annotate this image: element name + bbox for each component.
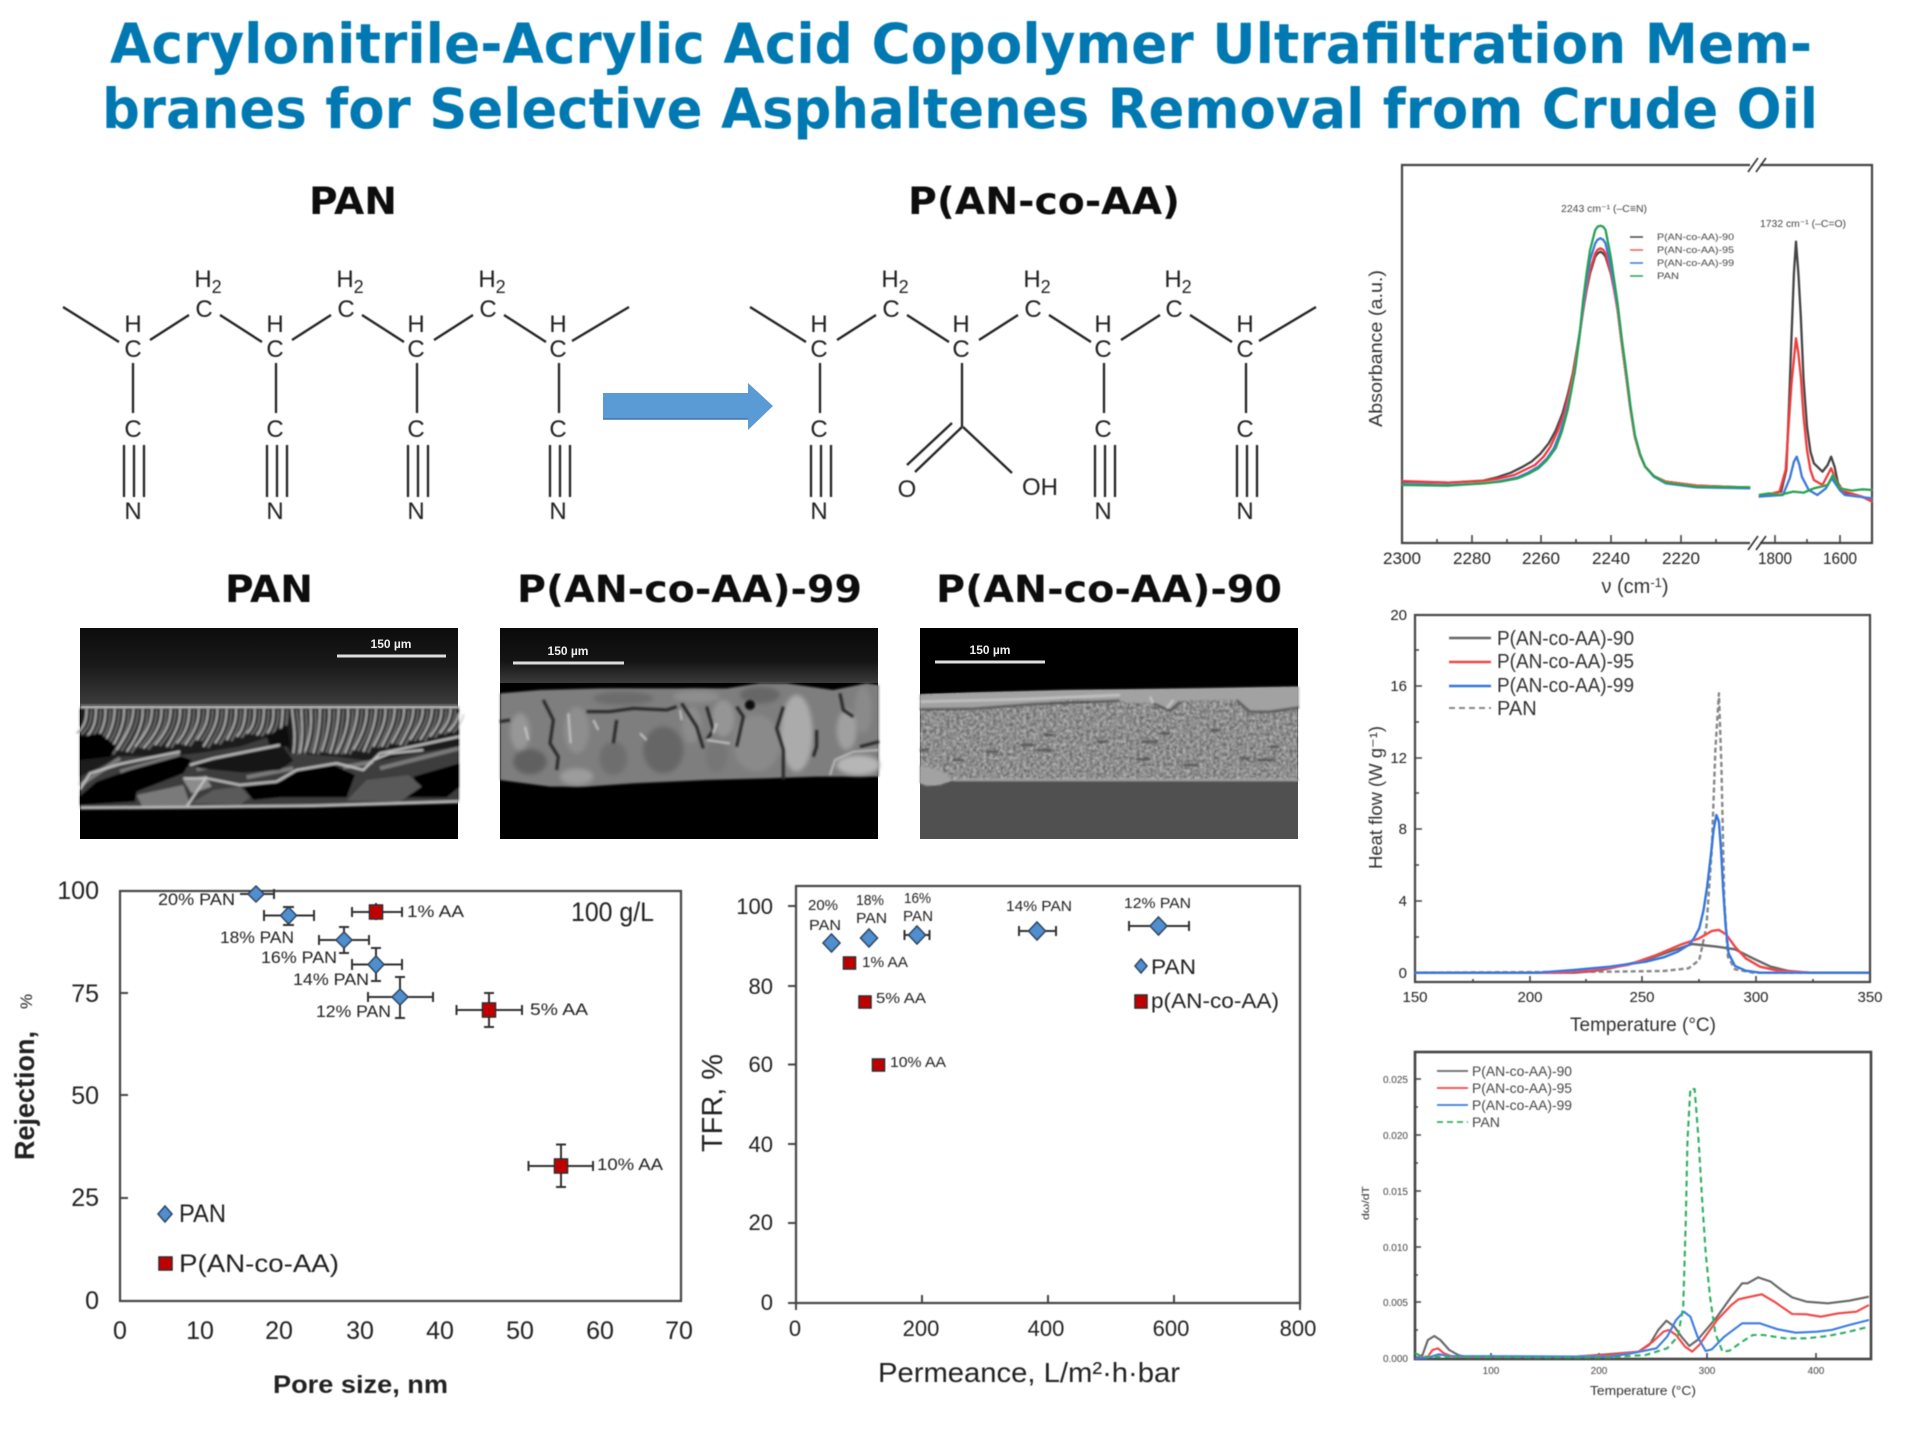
y axis tick labels: 25: [71, 1184, 99, 1212]
chemical structure: P(AN-co-AA): H: [881, 266, 899, 293]
chemical structure: PAN: H: [194, 266, 212, 293]
point labels: 16%: [904, 890, 931, 907]
x tick labels: 2240: [1592, 549, 1630, 568]
point labels: 20% PAN: [158, 890, 235, 909]
heading: PAN SEM: PAN: [225, 568, 313, 611]
x tick labels: 2260: [1522, 549, 1560, 568]
legend: PAN: [1657, 271, 1679, 282]
legend: P(AN-co-AA)-99: [1472, 1097, 1572, 1113]
chemical structure: P(AN-co-AA): C: [1165, 296, 1183, 323]
x axis tick labels: 10: [186, 1317, 214, 1345]
chemical structure: P(AN-co-AA): C: [1024, 296, 1042, 323]
chemical structure: PAN: C: [479, 296, 497, 323]
SEM image: P(AN-co-AA)-99: 150 µm: [548, 644, 588, 658]
chemical structure: P(AN-co-AA): C: [1236, 416, 1254, 443]
error bars: [240, 889, 593, 1187]
chemical structure: PAN: H: [124, 311, 142, 338]
x axis tick labels: 600: [1153, 1316, 1189, 1341]
curves: [1402, 226, 1872, 502]
chemical structure: PAN: N: [549, 498, 567, 525]
x axis tick labels: 40: [426, 1317, 454, 1345]
y axis tick labels: 75: [71, 980, 99, 1008]
x tick labels: [1402, 989, 1883, 1006]
x axis tick labels: 0: [789, 1316, 801, 1341]
x tick labels: [1483, 1366, 1825, 1377]
chart: DTG conversion rate: [1360, 1052, 1871, 1398]
copolymer data points: [844, 957, 884, 1071]
title: Acrylonitrile-Acrylic Acid Copolymer Ultrafiltration Mem-: [110, 12, 1812, 76]
y tick labels: 0.025: [1383, 1075, 1408, 1086]
y axis title: Heat flow (W g⁻¹): [1366, 726, 1386, 869]
copolymer data points: [370, 905, 568, 1173]
y tick labels: [1390, 607, 1407, 982]
y axis tick labels: 20: [749, 1210, 773, 1235]
SEM image: P(AN-co-AA)-99: [500, 628, 880, 839]
legend: PAN: [1497, 698, 1537, 720]
y axis tick labels: 0: [85, 1287, 99, 1315]
chemical structure: P(AN-co-AA): H: [1094, 311, 1112, 338]
legend: P(AN-co-AA)-95: [1657, 245, 1734, 256]
x axis title: ): [1662, 576, 1669, 598]
x tick labels: 300: [1699, 1366, 1716, 1377]
chemical structure: P(AN-co-AA): OH: [1022, 474, 1058, 501]
y axis tick labels: [57, 877, 99, 1315]
point labels: PAN: [903, 908, 933, 925]
chemical structure: P(AN-co-AA): N: [810, 498, 828, 525]
point labels: 5% AA: [876, 990, 926, 1007]
chemical structure: PAN: H: [549, 311, 567, 338]
x axis title: ν (cm: [1601, 576, 1650, 598]
chemical structure: PAN: H: [336, 266, 354, 293]
x axis title: Pore size, nm: [273, 1371, 448, 1399]
y axis tick labels: 60: [749, 1052, 773, 1077]
chemical structure: P(AN-co-AA): H: [1236, 311, 1254, 338]
chart: TFR vs permeance: [697, 886, 1316, 1388]
point labels: 5% AA: [530, 1000, 589, 1019]
y tick labels: 8: [1399, 821, 1407, 838]
y axis tick labels: [736, 894, 773, 1315]
x axis tick labels: 0: [113, 1317, 127, 1345]
chemical structure: PAN: C: [407, 336, 425, 363]
x tick labels: 1800: [1758, 549, 1792, 568]
chemical structure: P(AN-co-AA): H: [952, 311, 970, 338]
point labels: 18% PAN: [220, 928, 294, 947]
x axis tick labels: 200: [903, 1316, 939, 1341]
x axis title: -1: [1650, 575, 1662, 590]
chemical structure: P(AN-co-AA): 2: [1182, 277, 1192, 297]
point labels: 14% PAN: [1006, 898, 1072, 915]
chemical structure: P(AN-co-AA): C: [952, 336, 970, 363]
chemical structure: PAN: N: [266, 498, 284, 525]
peak annotations: 2243 cm⁻¹ (–C≡N): [1561, 203, 1647, 215]
x axis tick labels: [113, 1317, 693, 1345]
heading: P(AN-co-AA)-99 SEM: P(AN-co-AA)-99: [517, 568, 862, 611]
legend: P(AN-co-AA)-90: [1472, 1063, 1572, 1079]
x axis tick labels: 800: [1280, 1316, 1316, 1341]
chemical structure: PAN: C: [549, 416, 567, 443]
error bars: [904, 921, 1189, 940]
x tick labels: 350: [1857, 989, 1883, 1006]
chart: rejection vs pore size: [9, 877, 693, 1399]
chemical structure: P(AN-co-AA): C: [1094, 336, 1112, 363]
point labels: PAN: [809, 917, 841, 934]
y tick labels: 16: [1390, 678, 1407, 695]
heading: PAN structure: PAN: [309, 180, 397, 223]
x axis tick labels: 30: [346, 1317, 374, 1345]
legend: PAN: [1472, 1114, 1500, 1130]
legend: PAN: [1151, 956, 1196, 979]
y axis tick labels: 80: [749, 974, 773, 999]
chemical structure: PAN: C: [407, 416, 425, 443]
chemical structure: PAN: 2: [354, 277, 364, 297]
heading: P(AN-co-AA)-90 SEM: P(AN-co-AA)-90: [936, 568, 1282, 611]
chemical structure: PAN: H: [478, 266, 496, 293]
y axis tick labels: 100: [57, 877, 99, 905]
legend: P(AN-co-AA)-95: [1497, 651, 1634, 673]
y axis tick labels: 50: [71, 1082, 99, 1110]
chemical structure: PAN: C: [195, 296, 213, 323]
SEM image: P(AN-co-AA)-90: [920, 628, 1299, 839]
x tick labels: 400: [1808, 1366, 1825, 1377]
legend: P(AN-co-AA)-95: [1472, 1080, 1572, 1096]
chemical structure: PAN: C: [266, 336, 284, 363]
legend: p(AN-co-AA): [1151, 990, 1279, 1013]
chart: DSC heat flow: [1366, 607, 1883, 1036]
arrow: PAN to copolymer: [603, 383, 773, 430]
legend: P(AN-co-AA)-90: [1657, 232, 1734, 243]
x axis tick labels: 70: [665, 1317, 693, 1345]
chemical structure: PAN: C: [124, 416, 142, 443]
chemical structure: P(AN-co-AA): [750, 266, 1316, 525]
legend: [1437, 1063, 1572, 1130]
x tick labels: 150: [1402, 989, 1428, 1006]
legend: [1449, 628, 1634, 720]
chemical structure: PAN: H: [407, 311, 425, 338]
PAN data points: [823, 917, 1167, 952]
y tick labels: 0.010: [1383, 1243, 1408, 1254]
chemical structure: P(AN-co-AA): H: [1164, 266, 1182, 293]
chart: FTIR spectra: [1366, 158, 1872, 598]
legend: [1135, 956, 1279, 1013]
y axis unit: %: [17, 994, 36, 1009]
y tick labels: 0.015: [1383, 1187, 1408, 1198]
chemical structure: PAN: [63, 266, 629, 525]
legend: [1630, 232, 1734, 282]
chemical structure: P(AN-co-AA): 2: [899, 277, 909, 297]
y axis tick labels: 40: [749, 1132, 773, 1157]
y axis title: TFR, %: [697, 1054, 729, 1152]
chemical structure: P(AN-co-AA): C: [1236, 336, 1254, 363]
x tick labels: 2280: [1453, 549, 1491, 568]
y axis title: dω/dT: [1360, 1185, 1372, 1220]
point labels: [158, 890, 664, 1174]
legend: PAN: [179, 1200, 226, 1228]
chemical structure: PAN: N: [124, 498, 142, 525]
x axis title: Temperature (°C): [1570, 1015, 1716, 1036]
x axis tick labels: 400: [1028, 1316, 1064, 1341]
legend: P(AN-co-AA)-99: [1497, 675, 1634, 697]
concentration note: 100 g/L: [571, 897, 654, 927]
SEM image: PAN: [77, 628, 464, 839]
y tick labels: 12: [1390, 750, 1407, 767]
chemical structure: PAN: C: [266, 416, 284, 443]
chemical structure: P(AN-co-AA): N: [1236, 498, 1254, 525]
point labels: PAN: [856, 910, 887, 927]
PAN data points: [248, 886, 408, 1005]
chemical structure: PAN: C: [124, 336, 142, 363]
point labels: 14% PAN: [293, 970, 369, 989]
x axis tick labels: 50: [506, 1317, 534, 1345]
chemical structure: PAN: C: [337, 296, 355, 323]
heading: P(AN-co-AA) structure: P(AN-co-AA): [908, 180, 1180, 223]
y axis tick labels: 100: [736, 894, 773, 919]
y axis tick labels: 0: [761, 1290, 773, 1315]
chemical structure: P(AN-co-AA): 2: [1041, 277, 1051, 297]
curves: [1415, 1089, 1869, 1358]
chemical structure: P(AN-co-AA): H: [810, 311, 828, 338]
point labels: 18%: [856, 892, 884, 909]
y tick labels: 0.005: [1383, 1298, 1408, 1309]
legend: [158, 1200, 339, 1278]
x axis tick labels: 20: [265, 1317, 293, 1345]
title: branes for Selective Asphaltenes Removal from Crude Oil: [102, 77, 1818, 141]
SEM image: PAN: 150 µm: [371, 637, 411, 651]
x tick labels: 100: [1483, 1366, 1500, 1377]
y tick labels: 0.000: [1383, 1354, 1408, 1365]
chemical structure: P(AN-co-AA): O: [898, 476, 916, 503]
x tick labels: 2220: [1662, 549, 1700, 568]
curves: [1415, 693, 1869, 973]
chemical structure: PAN: 2: [496, 277, 506, 297]
chemical structure: P(AN-co-AA): C: [810, 336, 828, 363]
chemical structure: P(AN-co-AA): N: [1094, 498, 1112, 525]
point labels: 10% AA: [597, 1155, 664, 1174]
x axis title: Temperature (°C): [1590, 1383, 1696, 1398]
chemical structure: P(AN-co-AA): C: [810, 416, 828, 443]
point labels: 12% PAN: [316, 1002, 391, 1021]
x tick labels: 250: [1629, 989, 1655, 1006]
x axis tick labels: [789, 1316, 1316, 1341]
point labels: 20%: [808, 897, 838, 914]
chemical structure: PAN: H: [266, 311, 284, 338]
point labels: 1% AA: [407, 902, 465, 921]
x tick labels: 200: [1591, 1366, 1608, 1377]
chemical structure: PAN: N: [407, 498, 425, 525]
point labels: 12% PAN: [1124, 895, 1191, 912]
title: [102, 12, 1818, 141]
point labels: 16% PAN: [261, 948, 337, 967]
x axis tick labels: 60: [586, 1317, 614, 1345]
y tick labels: 0.020: [1383, 1131, 1408, 1142]
legend: P(AN-co-AA)-90: [1497, 628, 1634, 650]
y tick labels: 0: [1399, 965, 1407, 982]
x tick labels: 200: [1517, 989, 1543, 1006]
point labels: 10% AA: [890, 1054, 946, 1071]
chemical structure: P(AN-co-AA): C: [882, 296, 900, 323]
point labels: [808, 890, 1191, 1071]
peak annotation C=O: 1732 cm⁻¹ (–C=O): [1760, 218, 1846, 230]
x tick labels: [1383, 549, 1857, 568]
y tick labels: [1383, 1075, 1408, 1365]
chemical structure: P(AN-co-AA): H: [1023, 266, 1041, 293]
chemical structure: P(AN-co-AA): C: [1094, 416, 1112, 443]
y tick labels: 20: [1390, 607, 1407, 624]
legend: P(AN-co-AA)-99: [1657, 258, 1734, 269]
point labels: 1% AA: [862, 954, 908, 971]
legend: P(AN-co-AA): [179, 1250, 339, 1278]
x axis title: Permeance, L/m²·h·bar: [878, 1357, 1180, 1388]
chemical structure: PAN: C: [549, 336, 567, 363]
y axis title: Absorbance (a.u.): [1366, 270, 1386, 427]
SEM image: P(AN-co-AA)-90: 150 µm: [970, 643, 1010, 657]
x tick labels: 300: [1743, 989, 1769, 1006]
x tick labels: 1600: [1823, 549, 1857, 568]
chemical structure: PAN: 2: [212, 277, 222, 297]
x tick labels: 2300: [1383, 549, 1421, 568]
y axis title: Rejection,: [9, 1031, 40, 1160]
y tick labels: 4: [1399, 893, 1407, 910]
